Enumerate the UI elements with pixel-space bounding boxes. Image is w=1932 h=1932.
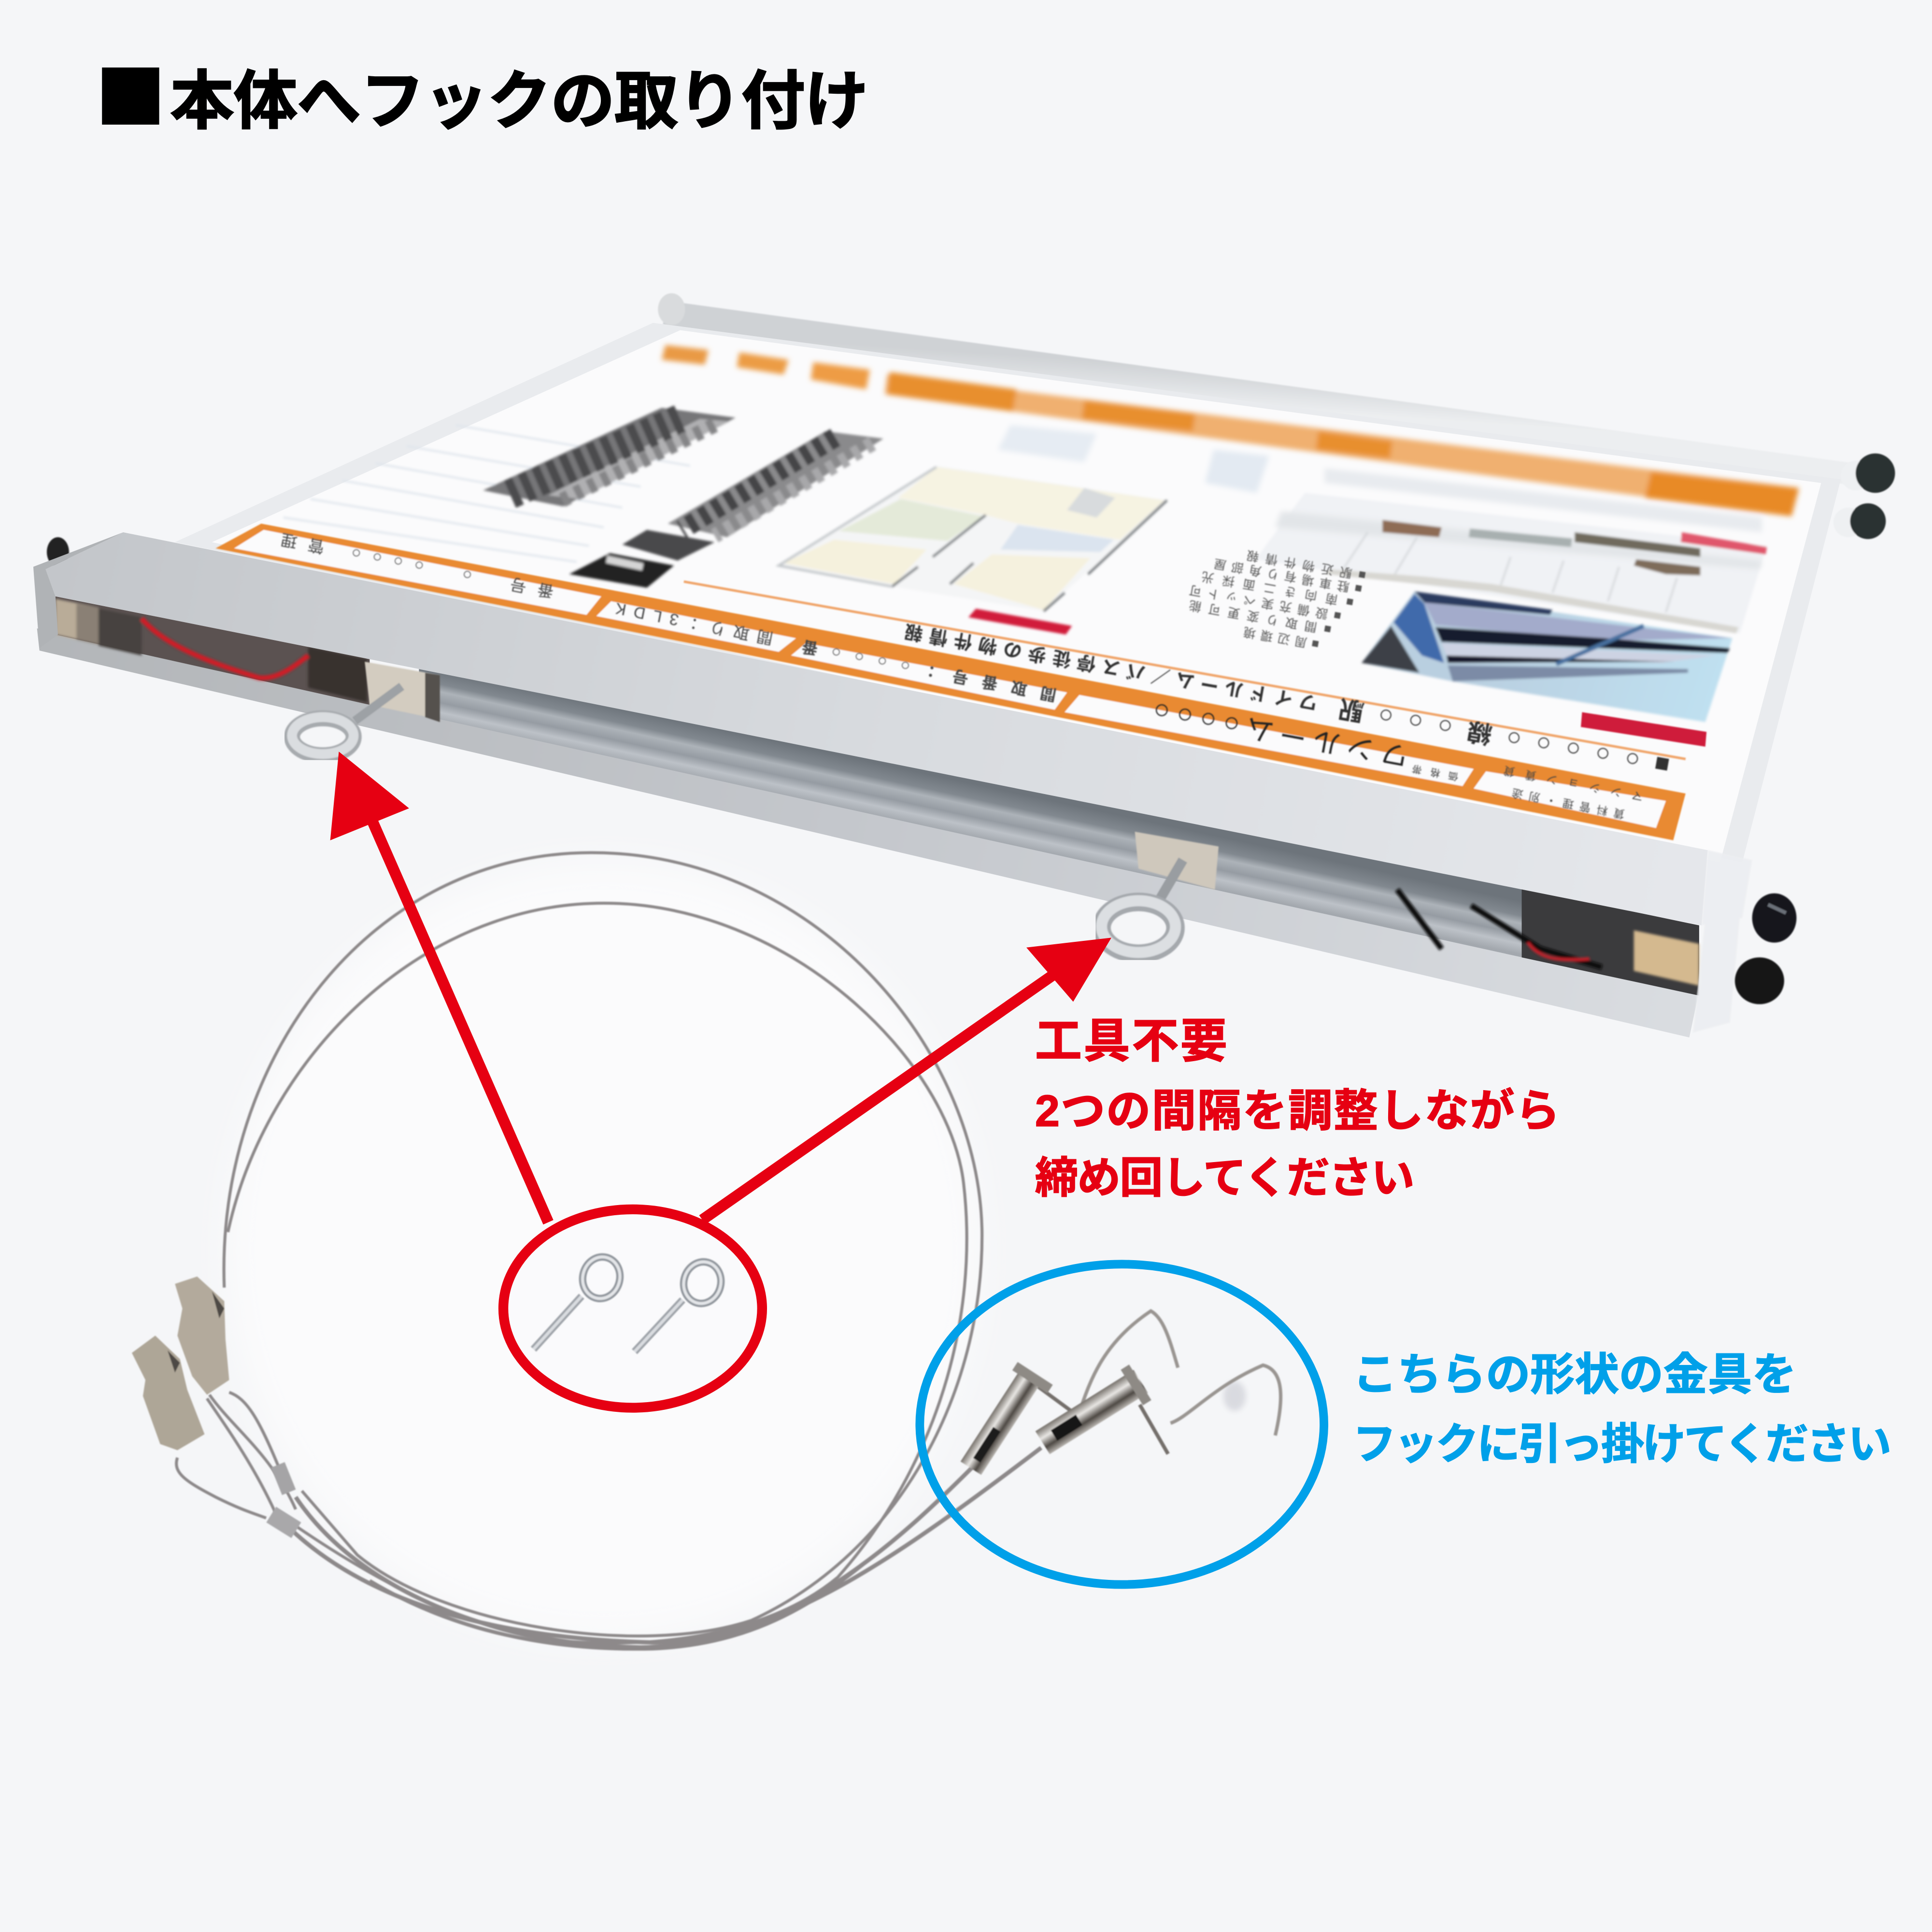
arrow to left hook (330, 752, 548, 1222)
front knobs (1735, 893, 1796, 1004)
left end blocks (56, 599, 99, 644)
crimp lower (266, 1507, 301, 1538)
back knobs (47, 454, 1895, 567)
cell one (234, 530, 601, 615)
cell three (791, 643, 1067, 710)
hook left bracket (292, 662, 440, 755)
strip cell labels: 価格帯 (1411, 763, 1459, 782)
poster left listing (284, 408, 883, 588)
right end wires (1397, 890, 1602, 967)
barrel two dark band (1051, 1415, 1082, 1441)
poster sheet (175, 323, 1841, 863)
title: ■ (95, 40, 166, 144)
blue note: フックに引っ掛けてください (1353, 1420, 1891, 1468)
floor plan walls (779, 467, 1167, 611)
top photo tag (1681, 532, 1767, 554)
feature list: ■設備充実ペット可 (1188, 583, 1342, 623)
pale header caption (1324, 468, 1762, 532)
floor plan (779, 466, 1167, 635)
slot right dark section (1522, 888, 1699, 995)
red note: 2つの間隔を調整しながら (1035, 1087, 1560, 1136)
clip slots (168, 1291, 224, 1373)
blue circle (920, 1264, 1324, 1585)
text block one highlights (548, 419, 729, 499)
strip cell labels: マンション賃貸 (1503, 764, 1644, 803)
red note (1035, 1015, 1560, 1202)
poster header (662, 345, 1799, 532)
rod end cap (658, 293, 685, 325)
strip cell labels: 番号 ○ ○○○○ 管理 (280, 530, 555, 600)
blue note: こちらの形状の金具を (1353, 1350, 1796, 1400)
bar left end (33, 532, 123, 648)
eye bolt two (635, 1258, 725, 1351)
right eye bolt (1102, 860, 1183, 953)
strip cell labels: 間取り：3LDK (614, 599, 775, 647)
red circle with eye bolts (503, 1209, 762, 1408)
strip cell labels: ワンルーム○○○○ (1151, 695, 1411, 772)
cell two (597, 601, 796, 652)
feature list: ■南向き二面採光 (1201, 569, 1355, 609)
hook wire two (1170, 1365, 1281, 1435)
lower lip (37, 628, 1700, 1037)
cell five (1474, 771, 1666, 828)
barrel one dark band (973, 1427, 1000, 1463)
hook wire one (1080, 1311, 1178, 1412)
slot left dark section (56, 597, 369, 705)
text block one (483, 408, 736, 506)
internals (56, 599, 1699, 986)
left eye bolt (292, 686, 402, 755)
product: panel with front bar (33, 293, 1895, 1037)
barrel flanges (1012, 1362, 1151, 1406)
orange address line (684, 582, 1686, 759)
title: 本体へフックの取り付け (170, 66, 868, 137)
wire clips and crimps (132, 1277, 301, 1538)
address text (903, 620, 1672, 780)
address text: ■○○○○○線○○○駅 (1337, 695, 1672, 780)
arrow to right hook (702, 938, 1111, 1220)
strip cell labels: 間取番号：○○○○番 (800, 637, 1058, 704)
hook base link (1037, 1386, 1168, 1454)
back rod (658, 293, 1854, 485)
red wire left (142, 619, 308, 678)
wire loops (176, 852, 1041, 1649)
red wire right (1528, 943, 1590, 960)
floor plan tag (968, 609, 1072, 635)
bottom right photo (1362, 591, 1733, 722)
feature list: ■駐車場有り角部屋 (1213, 556, 1363, 596)
soft hook shadow (1223, 1381, 1246, 1411)
grey tag row (622, 530, 715, 561)
slot channel (419, 669, 1528, 959)
hook fittings (961, 1311, 1281, 1475)
blue note (1353, 1350, 1891, 1468)
clip lower (132, 1335, 204, 1450)
photo wall strip (1326, 569, 1738, 633)
feature list (1188, 548, 1367, 651)
eye bolt one (534, 1253, 625, 1349)
address text: ワイドルーム／バス停徒歩の物件情報 (903, 620, 1319, 713)
hook right bracket (1102, 832, 1219, 953)
text block two (668, 431, 883, 537)
feature list: ■周辺環境 (1243, 625, 1320, 651)
orange info strip (215, 524, 1686, 840)
bottom photo tag (1581, 712, 1706, 747)
strip cell labels (280, 530, 1644, 821)
cell four (1065, 695, 1474, 786)
crimp upper (271, 1462, 296, 1495)
feature list: ■駅近物件情報 (1246, 548, 1367, 582)
feature list: ■間取り変更可能 (1188, 598, 1333, 637)
barrel two (1036, 1370, 1148, 1454)
red note: 工具不要 (1035, 1015, 1227, 1067)
clip upper (175, 1277, 229, 1395)
pale blue patches (998, 425, 1096, 462)
clear right caps (1693, 850, 1752, 1033)
right beige blocks (1634, 930, 1699, 986)
front bar (33, 532, 1752, 1037)
top right photo (1255, 493, 1767, 633)
black tag rows (569, 553, 674, 588)
bar face (45, 532, 1708, 925)
photo backdrop glow (228, 863, 980, 1639)
red note: 締め回してください (1035, 1153, 1415, 1202)
strip cell labels: 賃料管理・別途 (1511, 786, 1626, 821)
barrel one (961, 1366, 1043, 1475)
title (95, 40, 868, 144)
